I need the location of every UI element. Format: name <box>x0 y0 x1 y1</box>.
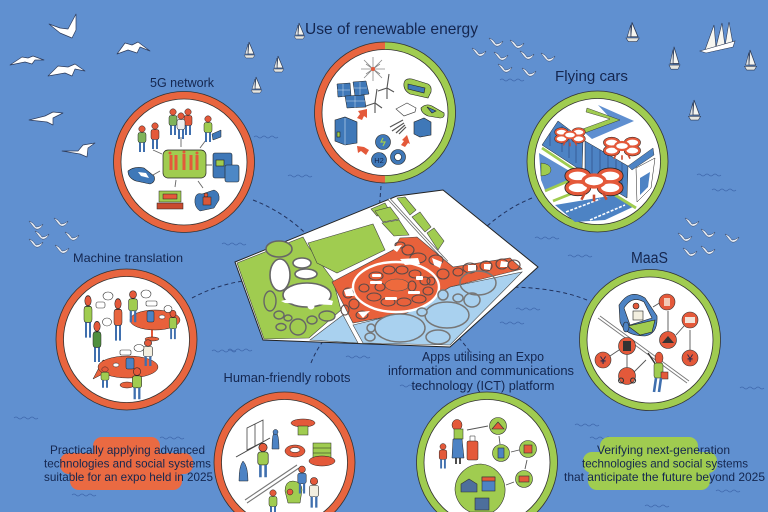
heading: machine translation: Machine translation <box>73 251 183 265</box>
network lines <box>467 426 527 485</box>
green path <box>580 108 620 134</box>
icon: person with laptop <box>204 116 221 142</box>
icon: flying car 2 <box>605 139 639 160</box>
heading: apps: information and communications <box>388 364 574 378</box>
icon: central screen <box>163 150 206 178</box>
icon: storage building <box>335 117 357 145</box>
text: Verifying next-generation <box>597 443 730 457</box>
blob: green <box>583 437 717 490</box>
text: technologies and social systems <box>582 456 748 470</box>
schooner <box>700 22 735 53</box>
ring <box>214 392 355 512</box>
icon: audience at TV <box>157 191 183 209</box>
ring <box>114 92 254 232</box>
text: that anticipate the future beyond 2025 <box>564 470 765 484</box>
left wall <box>542 121 583 171</box>
panel: human-friendly robots <box>214 371 355 512</box>
blue plaza top <box>585 105 634 139</box>
orange zone <box>332 237 522 323</box>
icon: data centre <box>213 153 239 182</box>
heading: apps: Apps utilising an Expo <box>422 350 544 364</box>
west circles <box>266 241 331 307</box>
panel: MaaS <box>580 250 720 410</box>
icon: wind turbines <box>366 74 394 113</box>
icon: drone robot <box>291 419 315 435</box>
parking lines <box>566 199 625 220</box>
icon: suitcase <box>467 436 478 460</box>
icon: hydrogen tank <box>396 103 416 116</box>
icon: group of people <box>169 109 192 139</box>
wall ribs <box>550 126 622 193</box>
dashed connectors <box>192 186 587 363</box>
panel: machine translation <box>56 251 197 410</box>
heading: 5G network: 5G network <box>150 76 215 90</box>
icon: woman <box>452 420 464 464</box>
network lines <box>610 302 690 372</box>
icons: service discs <box>595 294 698 384</box>
icon: green robot <box>285 481 302 503</box>
site map <box>235 190 538 347</box>
icon: person with phone <box>648 352 668 392</box>
walkway <box>389 199 447 262</box>
sailboats <box>244 22 757 120</box>
icons: energy discs <box>372 134 406 168</box>
icon: car <box>128 167 154 184</box>
icon: top table <box>130 310 180 341</box>
heading: renewable energy: Use of renewable energy <box>305 21 478 38</box>
icon: solar panels <box>337 81 369 108</box>
wall top right <box>628 148 654 170</box>
icon: small factory <box>414 118 431 137</box>
panel: 5G network <box>114 76 254 232</box>
icon: autonomous vehicle <box>619 294 657 336</box>
heading: flying cars: Flying cars <box>555 68 628 85</box>
heading: apps <box>388 350 574 393</box>
icon: bus <box>404 79 431 98</box>
spokes <box>153 137 212 188</box>
icon: flying car 3 <box>567 170 621 201</box>
heading: MaaS: MaaS <box>631 250 668 267</box>
icon: people with headsets <box>138 123 159 152</box>
icon: delivery robot with boxes <box>309 443 335 466</box>
central ring <box>353 262 439 312</box>
icons: visitors <box>269 466 319 512</box>
icon: sofa <box>195 190 219 211</box>
pavilions <box>341 242 520 319</box>
icons: app discs <box>490 418 536 488</box>
panel: flying cars <box>527 68 668 232</box>
icon: guide robot <box>272 430 279 449</box>
lower zone <box>555 195 635 222</box>
lower left zone <box>539 153 578 190</box>
icon: flying car 1 <box>556 129 584 146</box>
text <box>564 443 765 484</box>
callout: beyond 2025 <box>564 437 765 490</box>
icon: blue robot <box>239 461 248 481</box>
small seagull flocks <box>29 38 739 256</box>
icon: bottom table <box>93 356 158 388</box>
blue zones <box>310 272 522 345</box>
callout: 2025 <box>44 437 213 490</box>
text: technologies and social systems <box>44 456 211 470</box>
scene: city <box>539 105 655 222</box>
icon: sun <box>361 57 385 81</box>
icon: man with bag <box>258 443 268 477</box>
ring <box>416 392 558 512</box>
road <box>598 316 689 383</box>
green zones <box>237 197 444 339</box>
discs: glyphs: ¥ <box>686 353 694 365</box>
icon: shower plant <box>390 120 406 134</box>
large seagulls <box>10 14 150 157</box>
icon: child <box>439 444 447 468</box>
right wall <box>585 141 628 198</box>
south-east circles <box>365 271 496 344</box>
text: suitable for an expo held in 2025 <box>44 470 213 484</box>
ring <box>314 42 456 183</box>
icon: car <box>421 105 444 118</box>
blob: orange <box>60 437 193 490</box>
panel: Expo ICT apps <box>388 350 574 512</box>
text: Practically applying advanced <box>50 443 205 457</box>
map base <box>235 190 538 347</box>
ring <box>56 269 197 410</box>
icons: arrows <box>357 109 410 155</box>
ring <box>580 270 720 410</box>
discs: glyphs: ¥ <box>599 355 607 367</box>
discs: glyphs <box>599 298 695 383</box>
icon: ring robot <box>285 445 305 457</box>
ring <box>527 91 668 232</box>
end block <box>636 158 655 202</box>
heading: robots: Human-friendly robots <box>224 371 350 385</box>
icons: people talking <box>84 291 177 399</box>
icon: buildings cluster <box>455 464 505 512</box>
icons: energy discs: H2 <box>374 156 384 165</box>
icons: speech bubbles <box>96 290 172 355</box>
green half disc <box>541 163 551 176</box>
text <box>44 443 213 484</box>
heading: apps: technology (ICT) platform <box>412 379 554 393</box>
icon: gate <box>236 420 270 457</box>
panel: renewable energy <box>305 21 478 183</box>
walkway <box>245 465 299 503</box>
green stripes <box>542 148 636 208</box>
